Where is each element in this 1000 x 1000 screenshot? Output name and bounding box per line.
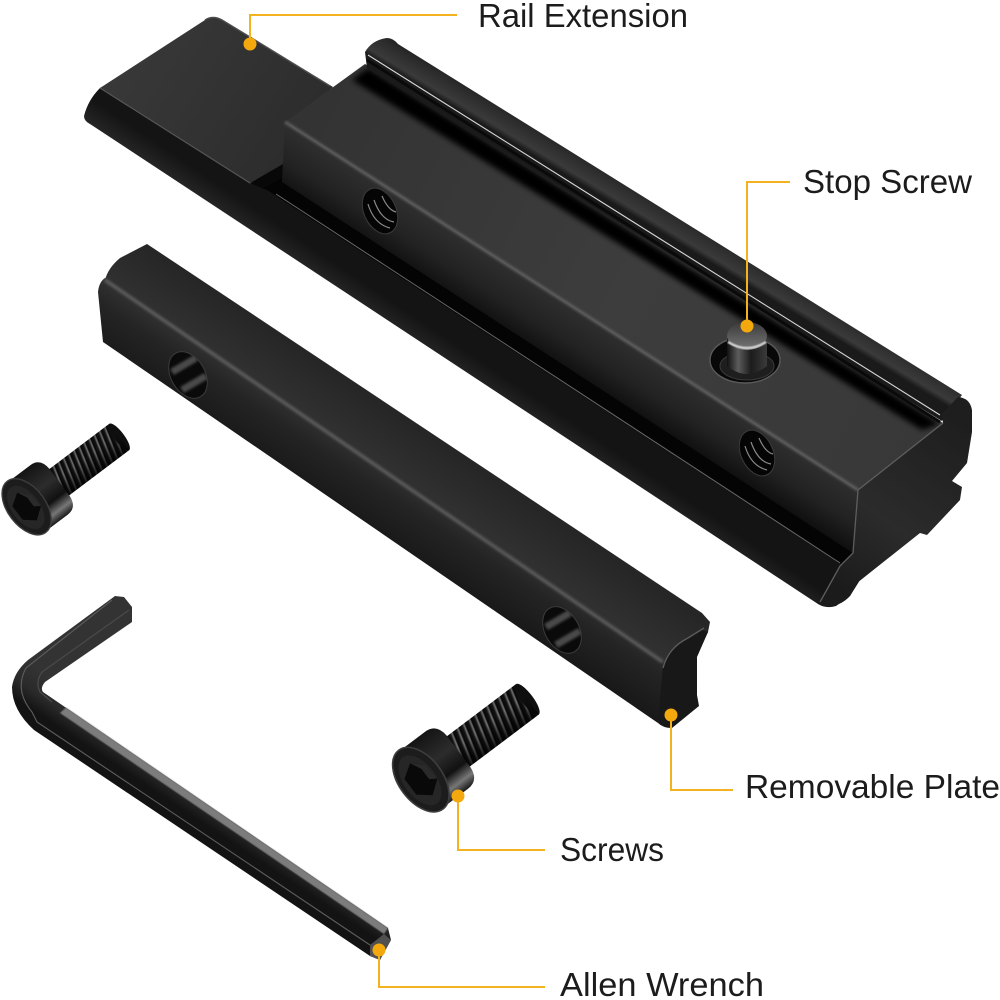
callout: screws: Screws [560,831,664,868]
panel: removable plate [98,244,710,728]
plate side face [98,278,664,723]
block side face [282,122,858,553]
plate hole right [542,606,582,654]
ridge highlight along block edge [285,122,858,490]
callout: rail extension [244,0,688,50]
panel: rail extension assembly [84,18,972,607]
callout: allen wrench [372,944,764,1000]
rail extension tab [100,18,333,183]
upper rail lip [365,38,962,421]
plate hole left [168,351,208,399]
plate end face [658,630,708,728]
dark groove under block [264,178,858,565]
rail end face [818,397,972,607]
lower flange of rail base [84,88,860,607]
plate top face [105,244,710,662]
threaded hole right [732,424,782,482]
shadow under rail lip [352,68,940,430]
threaded hole left [355,182,405,240]
block top face [285,64,943,490]
screw upper left [0,408,142,544]
wrench upper bevel [60,708,388,934]
callout: stop screw: Stop Screw [803,163,972,200]
allen wrench [12,596,391,960]
tab step shadow [250,160,290,190]
callout: removable plate [664,708,1000,805]
callout: stop screw [740,163,972,332]
callout: screws [452,790,664,868]
stop screw pin [710,322,780,383]
screw lower [381,666,554,822]
callout: removable plate: Removable Plate [745,768,1000,805]
